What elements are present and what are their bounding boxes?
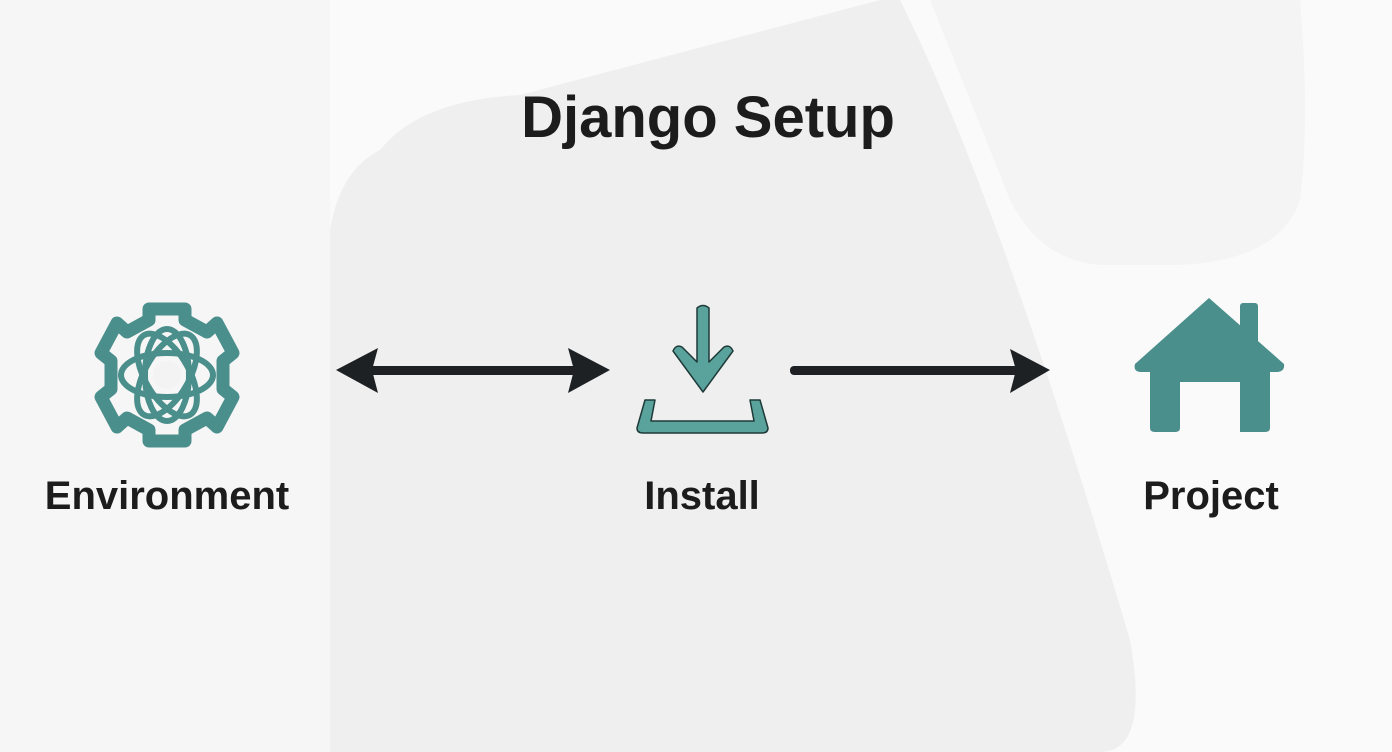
icon: gear <box>101 309 233 441</box>
arrow: right <box>790 349 1050 393</box>
icon: download <box>637 306 768 433</box>
title: Django Setup <box>521 85 895 150</box>
label: Install: Install <box>644 474 760 518</box>
arrow: double <box>336 348 610 393</box>
label: Project: Project <box>1143 474 1279 518</box>
icon: house <box>1135 298 1284 432</box>
label: Environment: Environment <box>45 474 289 518</box>
